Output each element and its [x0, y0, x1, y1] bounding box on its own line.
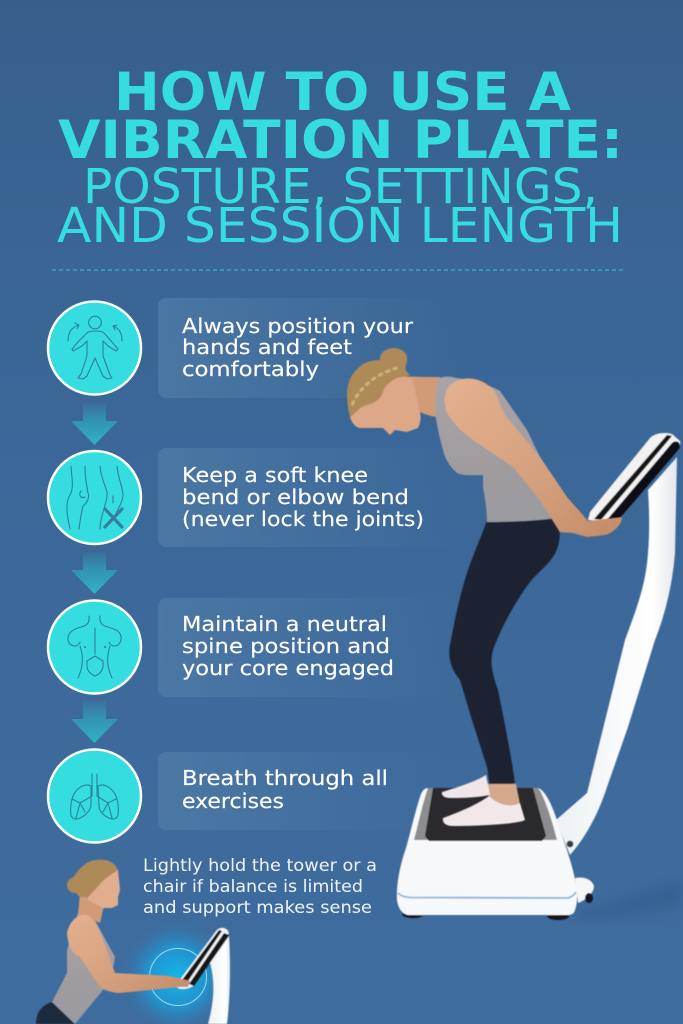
small leggings [36, 1002, 76, 1024]
icon: knees [48, 451, 141, 544]
small handle [177, 928, 229, 989]
arrow: step 3 to 4 [71, 700, 118, 743]
panel: step 3 text: Maintain a neutral [182, 612, 387, 636]
panel: step 3 text: spine position and [182, 634, 390, 658]
title: VIBRATION PLATE: [58, 110, 623, 171]
rear sock [442, 775, 490, 798]
panel: step 1 text [158, 298, 458, 398]
icon: back and spine [48, 600, 141, 694]
note: support tip: chair if balance is limited [143, 877, 363, 897]
feet [402, 910, 424, 918]
glow: hand contact point [117, 917, 237, 1024]
small arm [67, 915, 190, 993]
note: support tip: and support makes sense [143, 898, 372, 918]
panel: step 2 text [158, 448, 458, 547]
woman leaning on tower [347, 348, 622, 826]
note: support tip: Lightly hold the tower or a [143, 856, 377, 876]
small neck [78, 895, 105, 923]
hair [347, 348, 410, 417]
tower [556, 457, 677, 855]
panel: step 1 text: hands and feet [182, 335, 352, 359]
panel: step 2 text: Keep a soft knee [182, 463, 368, 487]
title [57, 62, 623, 254]
note: support tip [143, 856, 377, 918]
panel: step 4 text: Breath through all [182, 766, 388, 790]
panel: step 1 text: Always position your [182, 314, 414, 338]
arrow: step 2 to 3 [71, 552, 118, 594]
arrow: step 1 to 2 [71, 403, 118, 445]
panel: step 4 text [158, 752, 438, 830]
panel: step 4 text: exercises [182, 789, 284, 813]
tank top [435, 377, 557, 522]
vibration plate machine [397, 433, 680, 920]
title: POSTURE, SETTINGS, [83, 159, 598, 215]
title: HOW TO USE A [114, 62, 571, 123]
panel: step 3 text [158, 598, 458, 697]
small face [88, 870, 120, 908]
arm [445, 378, 622, 537]
front sock [443, 796, 525, 826]
ankle [487, 784, 520, 808]
icon: lungs [48, 750, 141, 842]
neck [398, 376, 440, 417]
panel: step 2 text: bend or elbow bend [182, 485, 409, 509]
panel: step 3 text: your core engaged [182, 656, 394, 680]
rear wheel [575, 877, 594, 903]
small tower [208, 936, 230, 1024]
small tank top [52, 913, 115, 1024]
title: AND SESSION LENGTH [57, 198, 623, 254]
icon: person with arrows [48, 302, 141, 394]
base [397, 788, 577, 915]
woman holding tower [36, 860, 230, 1024]
floor shadow [575, 880, 683, 920]
head face [350, 376, 421, 435]
small hair [67, 877, 83, 893]
leggings [449, 517, 560, 787]
panel: step 2 text: (never lock the joints) [182, 507, 424, 531]
panel: step 1 text: comfortably [182, 357, 319, 381]
handle [588, 433, 680, 522]
